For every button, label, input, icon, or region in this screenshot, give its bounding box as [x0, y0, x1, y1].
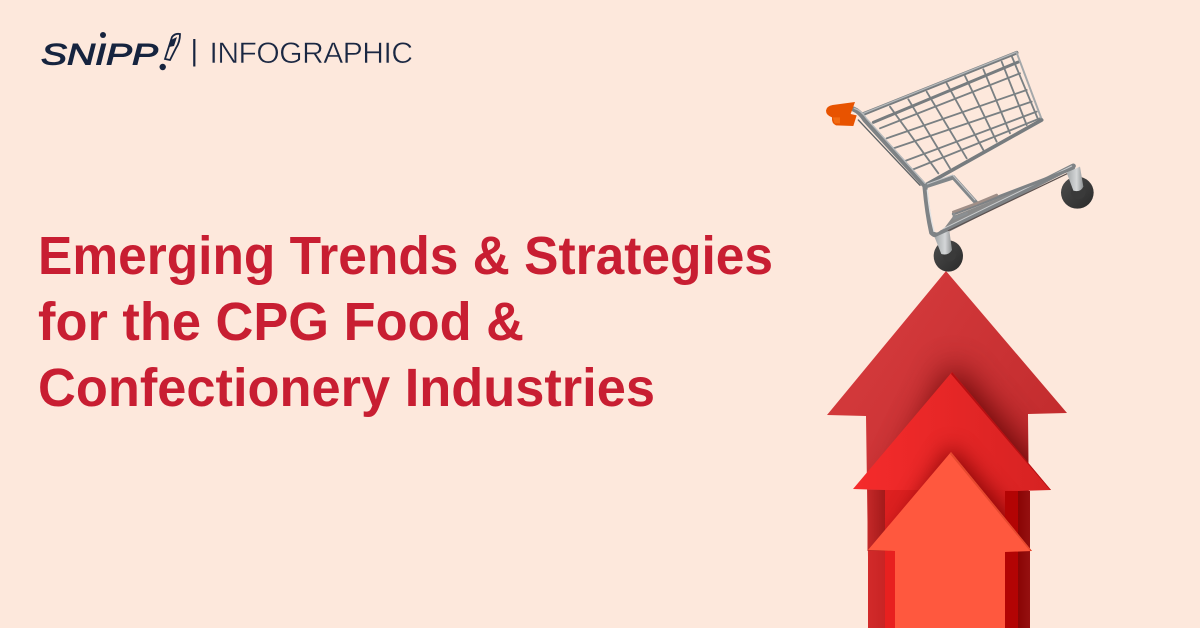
title: Emerging Trends & Strategies [38, 226, 773, 286]
front arrow [868, 452, 1032, 628]
logo: Snipp: SNIPP [41, 38, 158, 72]
orange handle [826, 102, 857, 126]
icon: shopping cart [826, 52, 1094, 272]
logo divider [193, 39, 195, 66]
back arrow [827, 271, 1067, 628]
rear wheel [1061, 177, 1094, 209]
handle arm [853, 109, 925, 186]
icon: stacked rising arrows [827, 271, 1067, 628]
lower frame [942, 166, 1075, 232]
basket rails [863, 52, 1042, 184]
title: for the CPG Food & [38, 292, 524, 352]
logo: Snipp [41, 32, 180, 72]
basket wires [880, 56, 1040, 173]
front wheel [934, 240, 963, 272]
title: Confectionery Industries [38, 358, 655, 418]
logo label: INFOGRAPHIC: INFOGRAPHIC [210, 37, 413, 70]
middle arrow [853, 372, 1051, 628]
title [38, 226, 773, 418]
